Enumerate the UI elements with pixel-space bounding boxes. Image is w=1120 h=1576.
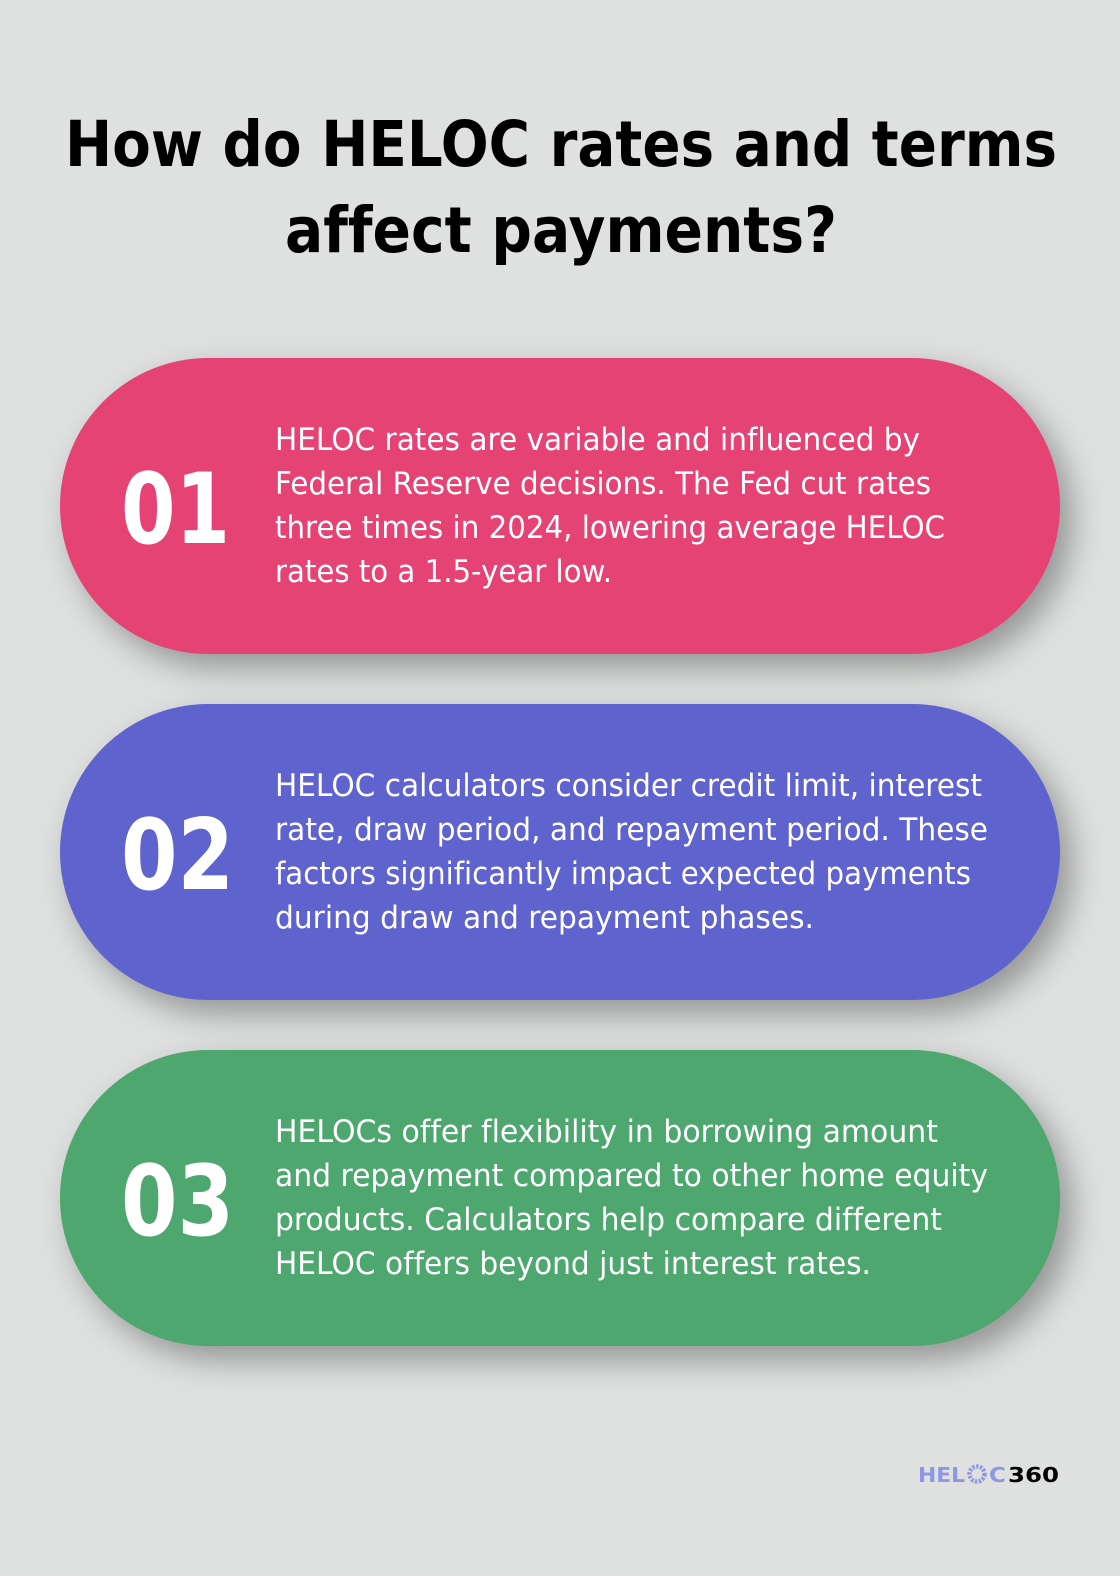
panel: step 02 — [60, 704, 1060, 1000]
text block 01: rates to a 1.5-year low. — [275, 554, 612, 590]
text block 02: factors significantly impact expected payments — [275, 856, 971, 892]
text block 02 — [275, 768, 988, 936]
text block 03: HELOC offers beyond just interest rates. — [275, 1246, 871, 1282]
number 03: 03 — [121, 1145, 234, 1259]
text block 03: products. Calculators help compare different — [275, 1202, 942, 1238]
logo: HELOC360: C — [989, 1463, 1006, 1487]
text block 02: HELOC calculators consider credit limit, interest — [275, 768, 982, 804]
title: affect payments? — [285, 194, 837, 267]
text block 03: HELOCs offer flexibility in borrowing amount — [275, 1114, 938, 1150]
text block 01: Federal Reserve decisions. The Fed cut rates — [275, 466, 931, 502]
number 02: 02 — [121, 799, 234, 913]
text block 01: three times in 2024, lowering average HELOC — [275, 510, 945, 546]
text block 02: during draw and repayment phases. — [275, 900, 814, 936]
text block 03: and repayment compared to other home equity — [275, 1158, 988, 1194]
title — [65, 108, 1057, 267]
text block 02: rate, draw period, and repayment period. These — [275, 812, 988, 848]
panel: step 01 — [60, 358, 1060, 654]
panel: step 03 — [60, 1050, 1060, 1346]
logo: HELOC360: HEL — [918, 1463, 965, 1487]
number 01: 01 — [121, 453, 230, 567]
text block 03 — [275, 1114, 988, 1282]
logo: HELOC360: 360 — [1008, 1463, 1059, 1487]
text block 01 — [275, 422, 945, 590]
text block 01: HELOC rates are variable and influenced by — [275, 422, 920, 458]
